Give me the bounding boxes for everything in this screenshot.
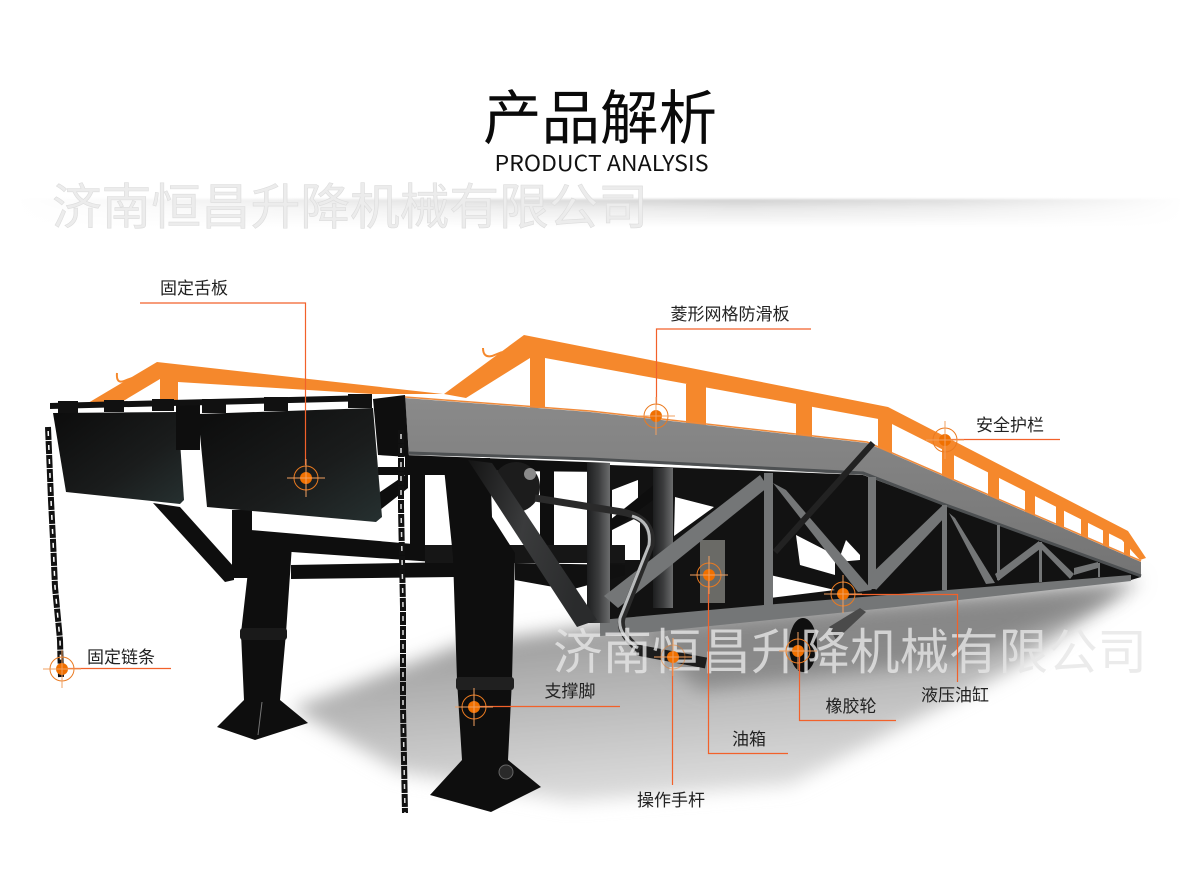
callout: 操作手杆: 操作手杆 [637, 791, 705, 810]
callout: 油箱 [690, 556, 788, 754]
main side beam [405, 398, 1141, 577]
front support leg [430, 458, 541, 812]
pump assembly [492, 462, 540, 512]
diagonal brace [468, 460, 597, 627]
white gaps in truss [612, 480, 860, 598]
ground shadow [292, 580, 1142, 802]
wheel [789, 608, 866, 672]
callout: 安全护栏 [926, 416, 1060, 459]
cross pipe [637, 650, 706, 663]
front orange railing [444, 335, 1146, 564]
callout: 液压油缸 [824, 575, 989, 705]
dock ramp illustration [48, 335, 1146, 813]
beam orange top edge [405, 397, 1141, 561]
callout: 菱形网格防滑板: 菱形网格防滑板 [670, 305, 790, 324]
hook on back railing [117, 373, 132, 382]
left support leg [217, 545, 308, 740]
railing posts [686, 384, 1130, 564]
hook on front railing [483, 348, 502, 356]
callout: 橡胶轮 [779, 632, 896, 720]
callout: 固定链条 [43, 648, 171, 688]
watermark: top: 济南恒昌升降机械有限公司 [52, 181, 648, 235]
tongue plates [53, 395, 409, 522]
callout: 液压油缸: 液压油缸 [921, 685, 989, 705]
callout: 固定舌板: 固定舌板 [160, 279, 228, 298]
operating handle [535, 498, 651, 650]
callout: 支撑脚: 支撑脚 [544, 682, 596, 701]
title: 产品解析 [483, 86, 717, 152]
callout: 安全护栏: 安全护栏 [976, 416, 1044, 435]
chain: left [48, 427, 61, 677]
chain: right [401, 430, 405, 813]
callout: 固定舌板 [140, 279, 325, 497]
subtitle: PRODUCT ANALYSIS [494, 146, 708, 178]
callout: 油箱: 油箱 [732, 730, 766, 749]
interior dark truss fill [610, 465, 1141, 622]
rear frame bars behind the handle [405, 455, 664, 590]
bottom chord [600, 575, 1131, 636]
callout: 固定链条: 固定链条 [87, 648, 155, 667]
rear legs and cross bracing [153, 467, 455, 582]
callout: 菱形网格防滑板 [637, 305, 811, 435]
callout: 操作手杆 [637, 638, 705, 810]
callout: 橡胶轮: 橡胶轮 [826, 697, 876, 716]
hydraulic cylinder rod [775, 443, 873, 552]
silver truss members [587, 463, 1100, 623]
header shadow band [15, 194, 1185, 230]
callout: 支撑脚 [455, 682, 620, 726]
beam dark lower lip [409, 453, 1141, 576]
hinge bar [50, 394, 372, 413]
back orange railing [88, 362, 443, 403]
watermark: lower: 济南恒昌升降机械有限公司 [553, 626, 1147, 680]
